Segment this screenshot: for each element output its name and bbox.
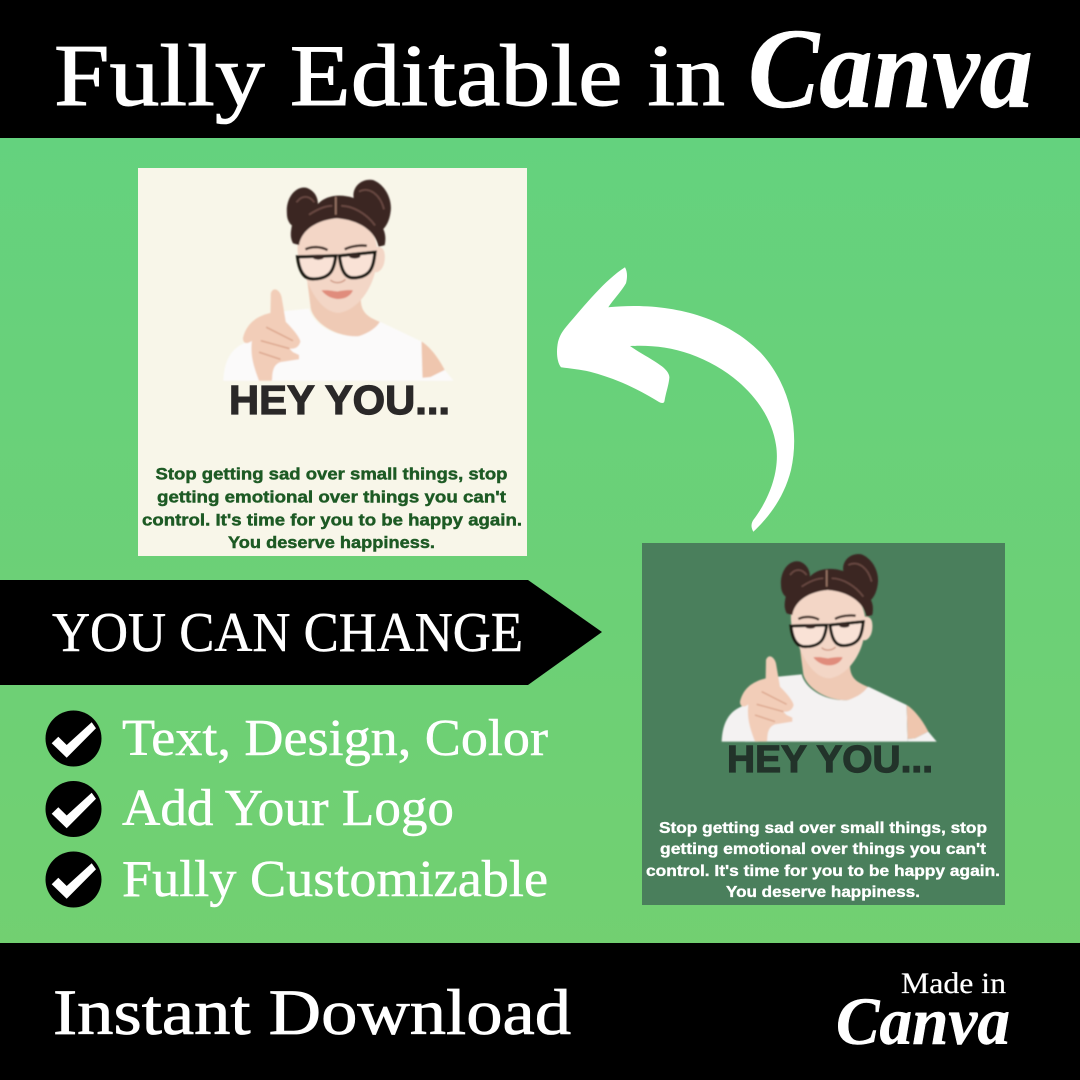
body copy [142, 464, 522, 552]
body copy: control. It's time for you to be happy again. [646, 863, 1000, 880]
canva logo word: Canva [836, 983, 1010, 1059]
body copy: You deserve happiness. [726, 884, 920, 901]
body copy: control. It's time for you to be happy again. [142, 510, 522, 530]
banner label: YOU CAN CHANGE [52, 602, 523, 664]
list item 2: Add Your Logo [122, 780, 454, 837]
list item 1: Text, Design, Color [122, 710, 548, 767]
heading: HEY YOU... [229, 377, 450, 423]
made in label: Made in [901, 967, 1006, 1000]
heading: HEY YOU... [727, 739, 933, 781]
icon: check 3 [46, 852, 102, 908]
arrow [557, 267, 794, 532]
body copy: You deserve happiness. [228, 533, 435, 552]
title: Fully Editable in [54, 28, 725, 125]
body copy: Stop getting sad over small things, stop [659, 820, 987, 837]
icon: check 2 [46, 781, 102, 837]
list item 3: Fully Customizable [122, 851, 548, 908]
panel: cream design preview [138, 168, 527, 556]
body copy [646, 820, 1000, 901]
body copy: getting emotional over things you can't [660, 841, 986, 858]
body copy: Stop getting sad over small things, stop [156, 464, 508, 484]
banner: you can change [0, 580, 602, 685]
panel: green design preview [642, 543, 1005, 905]
photo: woman pointing [722, 554, 937, 742]
footer heading: Instant Download [53, 977, 571, 1049]
icon: check 1 [46, 710, 102, 766]
header band [0, 0, 1080, 138]
body copy: getting emotional over things you can't [157, 488, 506, 506]
footer band [0, 943, 1080, 1080]
title logo word: Canva [748, 5, 1033, 132]
photo: woman pointing [223, 180, 454, 381]
feature list [46, 710, 548, 908]
